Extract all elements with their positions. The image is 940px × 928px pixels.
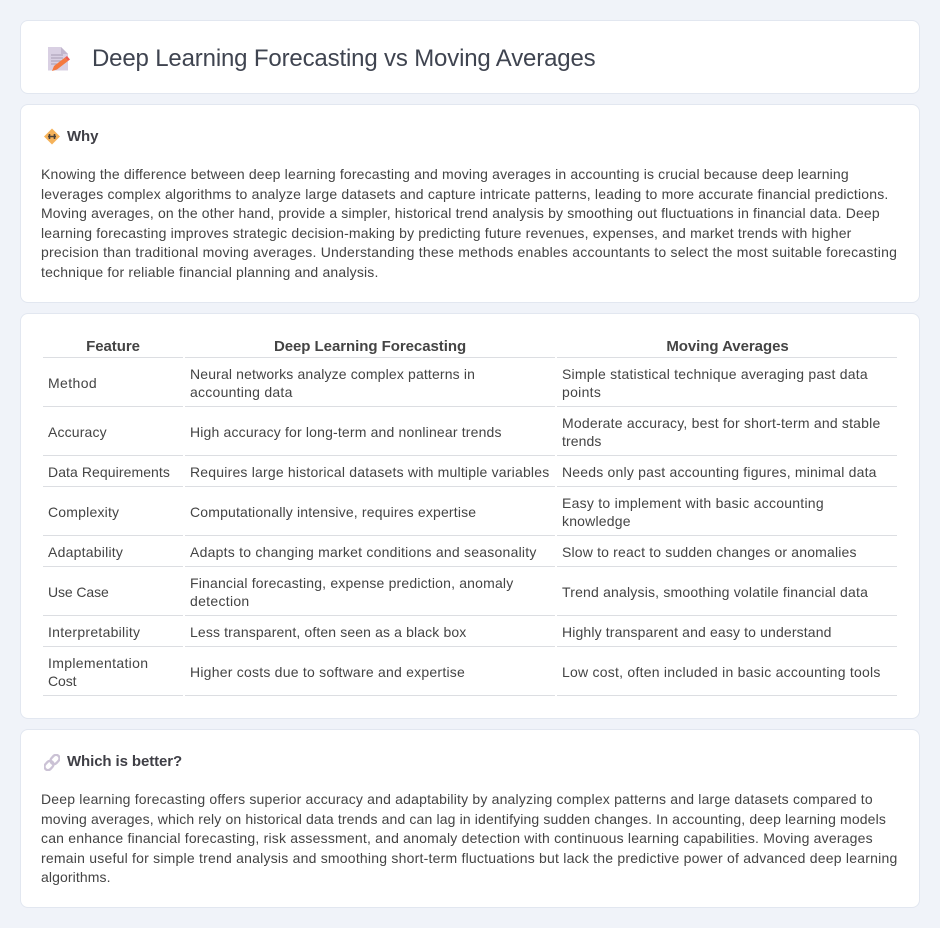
row: method: points bbox=[562, 384, 601, 400]
text block: verdict: moving averages, which rely on historical data trends and can lag in identifying sudden changes. In accounting, deep learning models bbox=[41, 810, 886, 826]
row: data requirements: Requires large historical datasets with multiple variables bbox=[190, 464, 549, 480]
row: accuracy: Accuracy bbox=[48, 424, 107, 440]
row: accuracy: Moderate accuracy, best for short-term and stable bbox=[562, 415, 880, 431]
text block: verdict bbox=[41, 791, 897, 885]
text block: why explanation: learning forecasting improves strategic decision-making by predicting future revenues, expenses, and market trends with higher bbox=[41, 224, 852, 240]
row: use case bbox=[48, 575, 868, 609]
text block: why explanation: technique for reliable financial planning and analysis. bbox=[41, 264, 379, 280]
table header: deep learning forecasting: Deep Learning Forecasting bbox=[274, 338, 466, 355]
row: interpretability bbox=[48, 624, 832, 640]
row: data requirements: Needs only past accounting figures, minimal data bbox=[562, 464, 877, 480]
table header: moving averages: Moving Averages bbox=[666, 338, 789, 355]
row: use case: Trend analysis, smoothing volatile financial data bbox=[562, 584, 868, 600]
text block: verdict: algorithms. bbox=[41, 869, 111, 885]
row: implementation cost: Low cost, often included in basic accounting tools bbox=[562, 664, 881, 680]
text block: verdict: remain useful for simple trend analysis and smoothing short-term fluctuations but lack the predictive power of advanced deep learning bbox=[41, 850, 897, 866]
text block: why explanation: leverages complex algorithms to analyze large datasets and capture intricate patterns, leading to more accurate financial predictions. bbox=[41, 186, 888, 202]
row: implementation cost: Cost bbox=[48, 673, 76, 689]
text block: why explanation bbox=[41, 166, 897, 280]
heading: which is better: Which is better? bbox=[67, 753, 182, 770]
heading: why: Why bbox=[67, 128, 98, 145]
row: method: Method bbox=[48, 375, 97, 391]
row: complexity: Easy to implement with basic accounting bbox=[562, 495, 824, 511]
row: implementation cost bbox=[48, 655, 881, 689]
row: data requirements bbox=[48, 464, 877, 480]
icon: chain link bbox=[44, 754, 60, 771]
row: interpretability: Less transparent, often seen as a black box bbox=[190, 624, 466, 640]
row: adaptability: Slow to react to sudden changes or anomalies bbox=[562, 544, 857, 560]
panel: why bbox=[20, 104, 920, 303]
row: use case: Financial forecasting, expense prediction, anomaly bbox=[190, 575, 513, 591]
row: method: Simple statistical technique averaging past data bbox=[562, 366, 868, 382]
row: adaptability: Adapts to changing market conditions and seasonality bbox=[190, 544, 537, 560]
panel: which is better bbox=[20, 729, 920, 908]
table header: feature: Feature bbox=[86, 338, 140, 355]
row: implementation cost: Higher costs due to software and expertise bbox=[190, 664, 465, 680]
row: complexity: Computationally intensive, requires expertise bbox=[190, 504, 476, 520]
row: complexity: Complexity bbox=[48, 504, 119, 520]
text block: verdict: Deep learning forecasting offers superior accuracy and adaptability by analyzing complex patterns and large datasets compared to bbox=[41, 791, 873, 807]
row: implementation cost: Implementation bbox=[48, 655, 148, 671]
text block: why explanation: precision than traditional moving averages. Understanding these methods enables accountants to select the most suitable forecasting bbox=[41, 244, 897, 260]
row: method bbox=[48, 366, 868, 400]
panel: title header bbox=[20, 20, 920, 94]
text block: verdict: can enhance financial forecasting, risk assessment, and anomaly detection with continuous learning capabilities. Moving averages bbox=[41, 830, 873, 846]
row: method: Neural networks analyze complex patterns in bbox=[190, 366, 475, 382]
panel: comparison table bbox=[20, 313, 920, 719]
row: adaptability bbox=[48, 544, 857, 560]
row: accuracy: High accuracy for long-term and nonlinear trends bbox=[190, 424, 502, 440]
row: use case: detection bbox=[190, 593, 250, 609]
row: accuracy: trends bbox=[562, 433, 602, 449]
title: Deep Learning Forecasting vs Moving Averages bbox=[92, 45, 595, 72]
row: data requirements: Data Requirements bbox=[48, 464, 170, 480]
row: complexity bbox=[48, 495, 824, 529]
row: use case: Use Case bbox=[48, 584, 109, 600]
row: interpretability: Interpretability bbox=[48, 624, 140, 640]
row: method: accounting data bbox=[190, 384, 293, 400]
row: accuracy bbox=[48, 415, 880, 449]
text block: why explanation: Moving averages, on the other hand, provide a simpler, historical trend analysis by smoothing out fluctuations in financial data. Deep bbox=[41, 205, 880, 221]
row: complexity: knowledge bbox=[562, 513, 631, 529]
row: interpretability: Highly transparent and easy to understand bbox=[562, 624, 832, 640]
icon: warning diamond bbox=[44, 128, 60, 144]
text block: why explanation: Knowing the difference between deep learning forecasting and moving averages in accounting is crucial because deep learning bbox=[41, 166, 849, 182]
icon: memo with pencil bbox=[48, 47, 70, 71]
row: adaptability: Adaptability bbox=[48, 544, 123, 560]
